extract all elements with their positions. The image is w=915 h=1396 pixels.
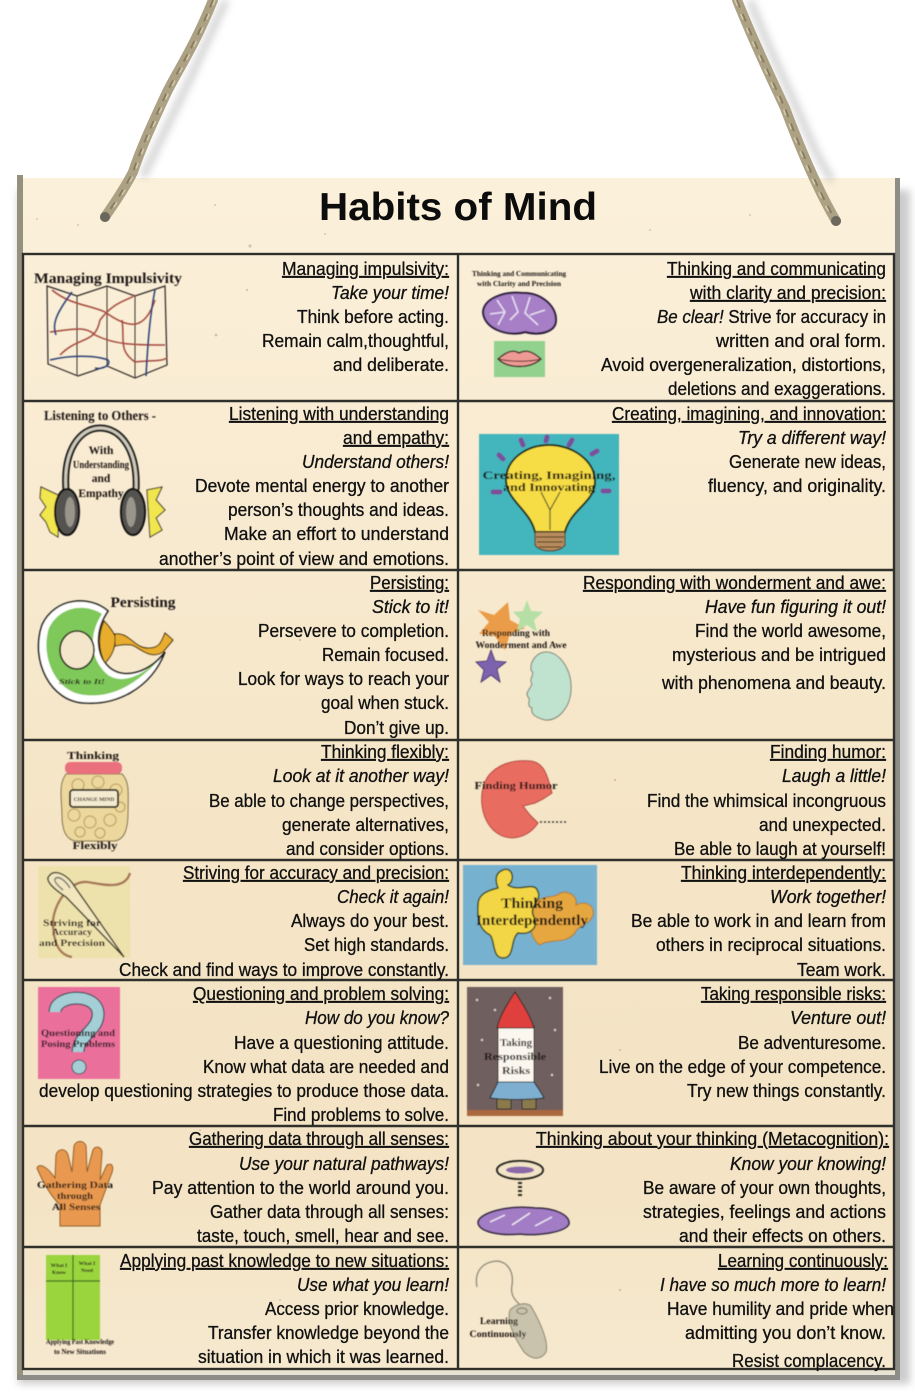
text: finding humor: [647, 742, 886, 859]
icon: needle and thread: Accuracy: [52, 927, 93, 937]
table grid: [23, 254, 894, 1369]
text: managing impulsivity: Think before acting.: [297, 307, 449, 327]
text: managing impulsivity: [262, 259, 449, 375]
text: thinking and communicating: deletions and exaggerations.: [668, 379, 886, 399]
icon: headphones: With: [89, 445, 114, 457]
text: listening with understanding: Devote mental energy to another: [195, 476, 449, 496]
text: managing impulsivity: Managing impulsivity:: [282, 259, 449, 279]
icon: stars and face: Responding with: [482, 628, 550, 638]
text: listening with understanding: another’s point of view and emotions.: [159, 549, 449, 569]
text: taking responsible risks: Taking responsible risks:: [701, 984, 886, 1004]
text: applying past knowledge: Access prior knowledge.: [265, 1299, 449, 1319]
text: thinking flexibly: [209, 742, 449, 859]
text: metacognition: strategies, feelings and actions: [643, 1202, 886, 1222]
icon: needle and thread: [38, 866, 130, 958]
panel: persisting: [39, 573, 449, 738]
text: thinking interdependently: Work together!: [770, 887, 886, 907]
panel: metacognition: [478, 1129, 889, 1246]
text: taking responsible risks: Try new things constantly.: [687, 1081, 886, 1101]
text: striving for accuracy: Set high standards.: [304, 935, 449, 955]
text: thinking flexibly: Thinking flexibly:: [321, 742, 449, 762]
icon: green chart: What I: [79, 1261, 95, 1267]
icon: green chart: What I: [51, 1263, 67, 1269]
icon: stars and face: [476, 600, 571, 720]
text: taking responsible risks: Be adventuresome.: [738, 1033, 886, 1053]
icon: green chart: Know: [52, 1270, 66, 1276]
text: thinking interdependently: Team work.: [797, 960, 886, 980]
icon: jar: Thinking: [67, 750, 120, 762]
text: questioning and problem solving: Find problems to solve.: [273, 1105, 449, 1125]
text: striving for accuracy: [119, 863, 449, 980]
text: metacognition: Know your knowing!: [730, 1154, 886, 1174]
text: responding with wonderment: Have fun figuring it out!: [705, 597, 886, 617]
icon: orange hand: Gathering Data: [37, 1181, 113, 1191]
panel: gathering data through senses: [37, 1129, 449, 1246]
panel: creating, imagining, innovation: [479, 404, 886, 555]
icon: question mark: Questioning and: [41, 1029, 116, 1039]
icon: jar: CHANGE MIND: [74, 797, 114, 803]
text: metacognition: [536, 1129, 889, 1246]
text: striving for accuracy: Check it again!: [337, 887, 449, 907]
text: thinking flexibly: generate alternatives,: [282, 815, 449, 835]
icon: question mark: Posing Problems: [41, 1040, 115, 1050]
text: learning continuously: admitting you don’t know.: [685, 1323, 886, 1343]
text: finding humor: Finding humor:: [770, 742, 886, 762]
text: applying past knowledge: [120, 1251, 449, 1367]
text: taking responsible risks: Live on the edge of your competence.: [599, 1057, 886, 1077]
icon: green chart: to New Situations: [54, 1348, 106, 1356]
text: finding humor: Be able to laugh at yourself!: [674, 839, 886, 859]
text: persisting: Persevere to completion.: [258, 621, 449, 641]
text: applying past knowledge: Applying past knowledge to new situations:: [120, 1251, 449, 1271]
text: applying past knowledge: Use what you learn!: [297, 1275, 449, 1295]
icon: brain and lips: [472, 269, 566, 377]
title: Habits of Mind: [319, 186, 597, 229]
icon: rocket: [467, 987, 563, 1116]
text: listening with understanding: and empathy:: [343, 428, 449, 448]
text: striving for accuracy: Check and find ways to improve constantly.: [119, 960, 449, 980]
panel: learning continuously: [470, 1251, 894, 1371]
text: thinking and communicating: with clarity and precision:: [689, 283, 886, 303]
text: thinking interdependently: others in reciprocal situations.: [656, 935, 886, 955]
text: thinking flexibly: Look at it another way!: [273, 766, 449, 786]
text: taking responsible risks: [599, 984, 886, 1101]
icon: orange hand: [37, 1142, 113, 1226]
icon: brain and lips: Thinking and Communicating: [472, 269, 566, 278]
text: questioning and problem solving: How do you know?: [305, 1008, 449, 1028]
text: questioning and problem solving: develop questioning strategies to produce those data.: [39, 1081, 449, 1101]
text: listening with understanding: person’s thoughts and ideas.: [228, 500, 449, 520]
text: learning continuously: Have humility and pride when: [667, 1299, 894, 1319]
text: finding humor: and unexpected.: [759, 815, 886, 835]
text: applying past knowledge: situation in which it was learned.: [198, 1347, 449, 1367]
text: questioning and problem solving: [39, 984, 449, 1125]
text: managing impulsivity: and deliberate.: [333, 355, 449, 375]
text: metacognition: Thinking about your thinking (Metacognition):: [536, 1129, 889, 1149]
text: persisting: Persisting:: [370, 573, 449, 593]
text: thinking flexibly: and consider options.: [286, 839, 449, 859]
panel: questioning and problem solving: [38, 984, 449, 1125]
icon: puzzle pieces: Interdependently: [476, 913, 588, 929]
text: creating, imagining, innovation: Try a different way!: [738, 428, 886, 448]
icon: laughing head: Finding Humor: [474, 781, 558, 792]
icon: headphones: [40, 408, 165, 537]
text: listening with understanding: Understand others!: [302, 452, 449, 472]
text: thinking and communicating: [601, 259, 886, 399]
icon: computer mouse: [470, 1261, 547, 1358]
icon: folded road map: [34, 271, 183, 378]
panel: thinking flexibly: [61, 742, 449, 859]
text: listening with understanding: [159, 404, 449, 569]
panel: thinking interdependently: [463, 863, 886, 980]
text: responding with wonderment: [583, 573, 886, 693]
text: thinking interdependently: Thinking interdependently:: [681, 863, 886, 883]
panel: taking responsible risks: [467, 984, 886, 1116]
icon: orange hand: through: [57, 1192, 94, 1202]
panel: applying past knowledge: [46, 1251, 449, 1367]
icon: jar: [61, 750, 128, 852]
text: persisting: Don’t give up.: [344, 718, 449, 738]
icon: needle and thread: and Precision: [39, 938, 105, 948]
text: responding with wonderment: Find the world awesome,: [695, 621, 886, 641]
text: questioning and problem solving: Questioning and problem solving:: [193, 984, 449, 1004]
icon: rocket: Risks: [502, 1065, 531, 1077]
text: gathering data through senses: Use your natural pathways!: [239, 1154, 449, 1174]
text: thinking interdependently: [631, 863, 886, 980]
text: gathering data through senses: Gather data through all senses:: [210, 1202, 449, 1222]
text: listening with understanding: Listening with understanding: [229, 404, 449, 424]
text: responding with wonderment: Responding with wonderment and awe:: [583, 573, 886, 593]
text: gathering data through senses: taste, touch, smell, hear and see.: [197, 1226, 449, 1246]
text: managing impulsivity: Remain calm,thoughtful,: [262, 331, 449, 351]
text: persisting: Remain focused.: [322, 645, 449, 665]
text: learning continuously: Resist complacency.: [732, 1351, 886, 1371]
text: listening with understanding: Make an effort to understand: [224, 524, 449, 544]
icon: thought bubble and brain: [478, 1161, 569, 1235]
icon: headphones: Understanding: [73, 459, 129, 471]
text: thinking and communicating: written and oral form.: [715, 331, 886, 351]
icon: light bulb: Creating, Imagining,: [482, 470, 616, 482]
text: persisting: goal when stuck.: [321, 693, 449, 713]
icon: puzzle pieces: Thinking: [501, 896, 564, 912]
text: creating, imagining, innovation: fluency, and originality.: [708, 476, 886, 496]
text: learning continuously: I have so much more to learn!: [660, 1275, 886, 1295]
icon: folded road map: Managing Impulsivity: [34, 271, 183, 287]
icon: green tape dispenser: [39, 595, 176, 703]
text: persisting: [238, 573, 449, 738]
text: persisting: Stick to it!: [372, 597, 449, 617]
text: applying past knowledge: Transfer knowledge beyond the: [208, 1323, 449, 1343]
text: metacognition: Be aware of your own thoughts,: [643, 1178, 886, 1198]
text: metacognition: and their effects on others.: [679, 1226, 886, 1246]
text: taking responsible risks: Venture out!: [790, 1008, 886, 1028]
panel: striving for accuracy: [38, 863, 449, 980]
text: gathering data through senses: Pay attention to the world around you.: [152, 1178, 449, 1198]
text: creating, imagining, innovation: Generate new ideas,: [729, 452, 886, 472]
text: thinking and communicating: Thinking and communicating: [667, 259, 886, 279]
text: gathering data through senses: Gathering data through all senses:: [189, 1129, 449, 1149]
icon: laughing head: [474, 761, 567, 838]
icon: rocket: Taking: [500, 1037, 532, 1049]
icon: needle and thread: Striving for: [43, 918, 101, 928]
panel: managing impulsivity: [34, 259, 449, 378]
text: thinking and communicating: Avoid overgeneralization, distortions,: [601, 355, 886, 375]
jute rope: right: [735, 0, 841, 226]
icon: green chart: [46, 1255, 114, 1356]
text: responding with wonderment: mysterious and be intrigued: [672, 645, 886, 665]
icon: headphones: Empathy: [78, 488, 124, 500]
text: gathering data through senses: [152, 1129, 449, 1246]
panel: listening with understanding: [40, 404, 449, 569]
text: persisting: Look for ways to reach your: [238, 669, 449, 689]
text: questioning and problem solving: Have a questioning attitude.: [234, 1033, 449, 1053]
panel: thinking and communicating: [472, 259, 886, 399]
icon: jar: Flexibly: [72, 840, 118, 852]
text: striving for accuracy: Always do your best.: [291, 911, 449, 931]
panel: finding humor: [474, 742, 886, 859]
icon: computer mouse: Continuously: [470, 1330, 527, 1340]
icon: orange hand: All Senses: [52, 1203, 100, 1213]
text: responding with wonderment: with phenomena and beauty.: [661, 673, 886, 693]
text: learning continuously: [660, 1251, 894, 1371]
icon: green chart: Need: [81, 1268, 93, 1274]
text: thinking interdependently: Be able to work in and learn from: [631, 911, 886, 931]
text: thinking and communicating: Be clear! Strive for accuracy in: [657, 307, 886, 327]
text: finding humor: Find the whimsical incongruous: [647, 791, 886, 811]
text: creating, imagining, innovation: [612, 404, 886, 496]
icon: headphones: and: [92, 473, 111, 485]
text: finding humor: Laugh a little!: [782, 766, 886, 786]
icon: green tape dispenser: Persisting: [110, 595, 176, 611]
jute rope: left: [100, 0, 226, 222]
icon: light bulb: and Innovating: [503, 482, 595, 494]
text: learning continuously: Learning continuously:: [718, 1251, 888, 1271]
icon: rocket: Responsible: [484, 1051, 546, 1063]
text: questioning and problem solving: Know what data are needed and: [203, 1057, 449, 1077]
icon: light bulb: [479, 434, 619, 555]
text: managing impulsivity: Take your time!: [331, 283, 449, 303]
text: thinking flexibly: Be able to change perspectives,: [209, 791, 449, 811]
icon: puzzle pieces: [463, 865, 597, 965]
panel: responding with wonderment: [476, 573, 886, 720]
text: creating, imagining, innovation: Creating, imagining, and innovation:: [612, 404, 886, 424]
icon: stars and face: Wonderment and Awe: [476, 640, 566, 650]
icon: green chart: Applying Past Knowledge: [46, 1338, 114, 1346]
icon: question mark: [38, 987, 120, 1079]
icon: headphones: Listening to Others -: [44, 408, 156, 423]
text: striving for accuracy: Striving for accuracy and precision:: [183, 863, 449, 883]
icon: brain and lips: with Clarity and Precision: [477, 279, 562, 288]
icon: green tape dispenser: Stick to It!: [59, 677, 105, 686]
icon: computer mouse: Learning: [480, 1317, 518, 1327]
